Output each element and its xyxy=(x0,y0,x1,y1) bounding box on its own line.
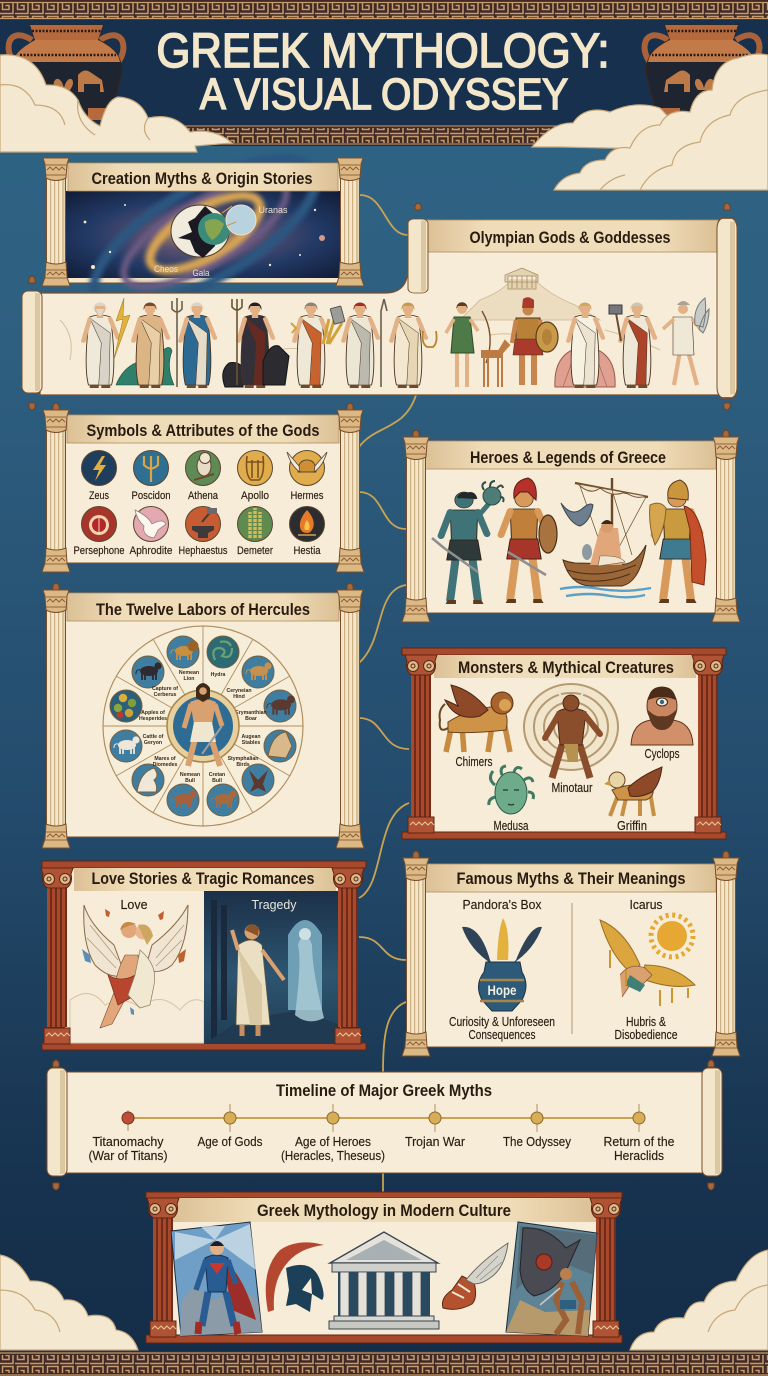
timeline labels xyxy=(88,1135,675,1163)
labor labels: Ceryneian xyxy=(226,688,252,694)
labor labels: Hind xyxy=(233,694,245,700)
panel: symbols and attributes: Symbols & Attributes of the Gods xyxy=(86,421,320,440)
panel: love stories xyxy=(41,861,366,1050)
cloud: bottom left xyxy=(0,1255,138,1350)
symbol labels: Persephone xyxy=(74,545,124,557)
timeline labels: Titanomachy xyxy=(92,1135,164,1149)
icon: right vase xyxy=(645,25,759,120)
medallion: Mares of Diomedes xyxy=(167,784,199,816)
labor labels xyxy=(139,670,267,784)
captions: Curiosity & Unforeseen xyxy=(449,1015,555,1029)
icon: winged sandal xyxy=(442,1243,508,1309)
timeline labels: (War of Titans) xyxy=(88,1149,168,1163)
tragedy illustration xyxy=(204,891,340,1044)
icon: Demeter wheat xyxy=(238,506,272,542)
medallion: white cattle xyxy=(110,730,142,762)
labors wheel xyxy=(103,626,303,826)
panel: creation myths: Creation Myths & Origin Stories xyxy=(92,169,312,188)
medallion: Cerberus xyxy=(132,656,164,688)
captions: Hubris & xyxy=(626,1015,667,1029)
panel: timeline xyxy=(47,1060,722,1190)
panel: monsters and creatures: Chimers xyxy=(456,755,492,769)
figure: hoplite warrior xyxy=(501,478,557,603)
image: comic hero card xyxy=(171,1222,262,1336)
central Hercules medallion xyxy=(167,683,239,766)
medallion: Ceryneian Hind xyxy=(242,656,274,688)
figure: Artemis with deer xyxy=(446,302,509,387)
panel: olympian gods scroll: Olympian Gods & Goddesses xyxy=(470,228,670,247)
panel: monsters and creatures xyxy=(402,648,726,839)
creation image: Cheos xyxy=(154,264,178,275)
panel: love stories: Love Stories & Tragic Romances xyxy=(92,869,314,888)
panel: heroes and legends xyxy=(402,430,740,622)
labor labels: Lion xyxy=(184,676,194,682)
medallion: Nemean Lion xyxy=(167,636,199,668)
figure: Zeus xyxy=(83,298,130,388)
panel: creation myths xyxy=(42,131,364,335)
panel: modern culture xyxy=(146,1192,622,1343)
cloud: top left xyxy=(0,55,232,152)
symbol labels: Apollo xyxy=(241,490,269,502)
figure: Hera xyxy=(116,302,174,388)
panel: olympian gods scroll xyxy=(22,203,737,410)
timeline labels: Age of Heroes xyxy=(295,1135,371,1149)
figure: Athena xyxy=(330,299,387,388)
icon: Athena owl xyxy=(186,450,220,486)
labor labels: Hydra xyxy=(211,672,225,678)
panel: timeline: Timeline of Major Greek Myths xyxy=(276,1081,492,1100)
creation image: Uranas xyxy=(258,205,288,216)
panel: monsters and creatures: Cyclops xyxy=(644,747,680,761)
icon: Apollo lyre xyxy=(238,450,272,486)
symbol labels: Athena xyxy=(188,490,219,502)
medallion: horse xyxy=(132,764,164,796)
icon: Aphrodite dove xyxy=(134,506,168,542)
illustration: Griffin xyxy=(604,767,662,816)
symbol labels: Demeter xyxy=(237,545,273,557)
medallion: golden apples xyxy=(110,690,142,722)
icon: Hestia flame xyxy=(290,506,324,542)
icon: Hermes helmet xyxy=(287,450,327,486)
cloud: top right xyxy=(532,54,768,190)
labor labels: Nemean xyxy=(180,772,200,778)
illustration: Medusa head xyxy=(489,766,533,814)
icon: Hephaestus anvil xyxy=(186,506,220,542)
panel: monsters and creatures: Minotaur xyxy=(552,781,592,795)
illustration: Cyclops xyxy=(631,687,693,745)
labor labels: Stymphalian xyxy=(228,756,258,762)
title: A VISUAL ODYSSEY xyxy=(200,70,568,119)
symbol labels: Aphrodite xyxy=(130,545,172,557)
timeline line and markers xyxy=(122,1104,645,1132)
icon: Zeus lightning xyxy=(82,450,116,486)
captions: Disobedience xyxy=(614,1028,678,1042)
figure: Jason with golden fleece xyxy=(650,480,706,603)
labor labels: Capture of xyxy=(152,686,178,692)
symbol labels: Hermes xyxy=(290,490,324,502)
timeline labels: (Heracles, Theseus) xyxy=(281,1149,385,1163)
panel: famous myths: Famous Myths & Their Meanings xyxy=(456,869,686,888)
labor labels: Nemean xyxy=(179,670,199,676)
title xyxy=(156,25,610,119)
illustration: Chimera xyxy=(440,685,513,752)
icon: Spartan helmet xyxy=(266,1242,324,1312)
labor labels: Birds xyxy=(236,762,250,768)
figure: Hephaestus xyxy=(609,302,655,388)
symbol labels: Hephaestus xyxy=(178,545,228,557)
labor labels: Bull xyxy=(212,778,222,784)
header banner xyxy=(0,0,768,146)
labor labels: Stables xyxy=(242,740,260,746)
figure: Perseus with Medusa head xyxy=(432,481,504,604)
panel: heroes and legends: Heroes & Legends of Greece xyxy=(470,448,666,467)
cosmic egg xyxy=(171,205,256,258)
captions xyxy=(449,1015,678,1042)
panel: twelve labors of Hercules: The Twelve Labors of Hercules xyxy=(96,600,310,619)
figure: Demeter xyxy=(291,302,342,388)
symbol labels xyxy=(74,490,324,557)
timeline labels: Return of the xyxy=(604,1135,675,1149)
panel: famous myths: Icarus xyxy=(630,898,662,912)
panel: monsters and creatures: Monsters & Mythical Creatures xyxy=(458,658,674,677)
timeline labels: Heraclids xyxy=(614,1149,664,1163)
icon: Poseidon trident xyxy=(134,450,168,486)
figure: Ares xyxy=(512,297,558,385)
bottom meander border xyxy=(0,1351,768,1376)
panel: modern culture: Greek Mythology in Modern Culture xyxy=(257,1201,511,1220)
timeline labels: Age of Gods xyxy=(198,1135,262,1149)
panel: love stories: Tragedy xyxy=(252,898,297,912)
Acropolis hill background xyxy=(60,268,660,360)
labor labels: Cretan xyxy=(209,772,225,778)
labor labels: Geryon xyxy=(144,740,162,746)
medallion: Stymphalian Birds xyxy=(242,764,274,796)
labor labels: Cerberus xyxy=(154,692,177,698)
figure: Apollo xyxy=(391,302,437,388)
medallion: Hydra xyxy=(207,636,239,668)
labor labels: Cattle of xyxy=(143,734,164,740)
figure: Poseidon xyxy=(172,298,215,388)
illustration: Pandora's box jar: Hope xyxy=(488,982,517,998)
scroll rods xyxy=(22,203,737,410)
icon: Persephone pomegranate xyxy=(82,506,116,542)
panel: twelve labors of Hercules xyxy=(42,583,364,848)
panel: symbols and attributes xyxy=(42,403,364,572)
title: GREEK MYTHOLOGY: xyxy=(156,25,610,78)
illustration: labyrinth and Minotaur xyxy=(524,684,618,778)
timeline labels: The Odyssey xyxy=(503,1135,572,1149)
medallion: Cretan Bull xyxy=(207,784,239,816)
image: hero versus monster card xyxy=(506,1222,597,1336)
labor labels: Mares of xyxy=(154,756,176,762)
symbol labels: Zeus xyxy=(89,490,109,502)
timeline labels: Trojan War xyxy=(405,1135,465,1149)
icon: left vase xyxy=(9,25,123,120)
labor labels: Diomedes xyxy=(153,762,178,768)
connector lines xyxy=(359,195,416,1192)
illustration: ship with rower xyxy=(560,478,651,597)
labor labels: Augean xyxy=(241,734,261,740)
labor labels: Hesperides xyxy=(139,716,167,722)
captions: Consequences xyxy=(468,1028,536,1042)
creation image xyxy=(66,131,340,335)
figure: Aphrodite with shell xyxy=(555,302,615,388)
symbol labels: Poscidon xyxy=(132,490,170,502)
medallion: Augean Stables xyxy=(264,730,296,762)
panel: monsters and creatures: Medusa xyxy=(494,819,529,833)
illustration: Icarus falling xyxy=(600,915,695,1006)
icon: Greek temple xyxy=(329,1232,439,1329)
panel: love stories: Love xyxy=(120,898,148,912)
figure: Hades with Cerberus xyxy=(223,299,289,388)
love illustration xyxy=(70,905,204,1043)
labor labels: Bull xyxy=(185,778,195,784)
labor labels: Erymanthian xyxy=(235,710,267,716)
cloud: bottom right xyxy=(630,1250,768,1350)
panel: monsters and creatures: Griffin xyxy=(617,819,647,833)
panel: famous myths xyxy=(402,851,740,1056)
labor labels: Apples of xyxy=(141,710,165,716)
figure: Hermes xyxy=(663,298,709,385)
illustration: Pandora's box jar xyxy=(462,918,542,1011)
panel: famous myths: Pandora's Box xyxy=(462,898,542,912)
medallion: Erymanthian Boar xyxy=(264,690,296,722)
labor labels: Boar xyxy=(245,716,257,722)
creation image: Gala xyxy=(192,268,210,279)
symbol labels: Hestia xyxy=(294,545,321,557)
